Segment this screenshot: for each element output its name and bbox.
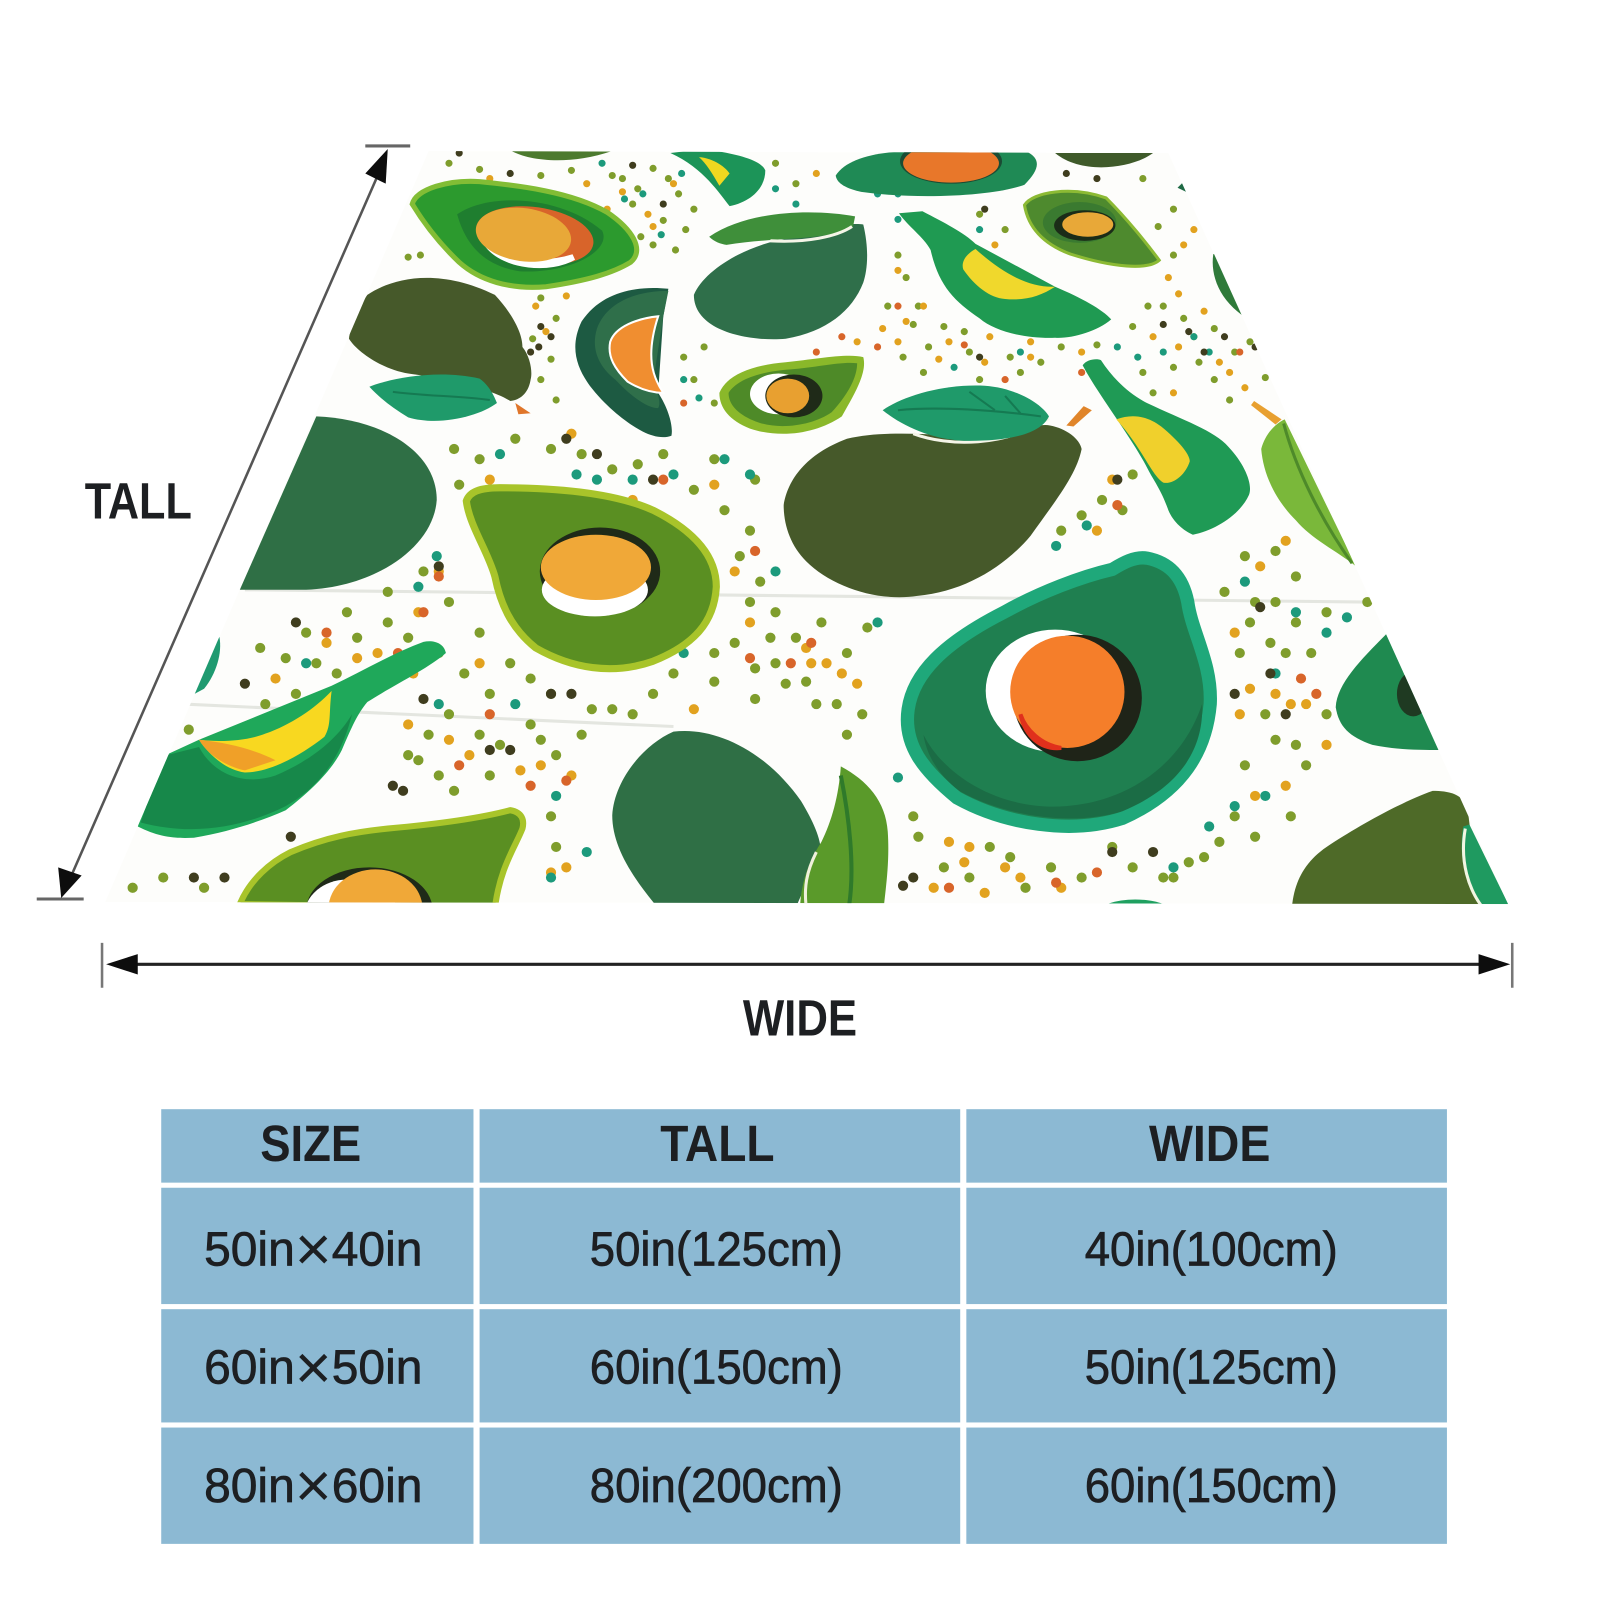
- row 80in x 60in: ×: [295, 1451, 332, 1521]
- avocado whole: big dark green left: [240, 416, 437, 590]
- avocado slice: bottom left with yellow flesh: [138, 641, 446, 838]
- row 60in x 50in: 60in(150cm): [590, 1342, 843, 1395]
- avocado fragment: bottom edge: [1107, 899, 1163, 904]
- polka dots: [133, 153, 1367, 893]
- header row: TALL: [660, 1115, 774, 1172]
- avocado fragment: top right dark: [1055, 153, 1153, 167]
- avocado whole: bottom right olive: [1292, 791, 1510, 908]
- tall label: TALL: [85, 472, 192, 529]
- row 50in x 40in: [161, 1188, 1447, 1304]
- blanket base: [105, 151, 1508, 904]
- header row: SIZE: [260, 1115, 361, 1172]
- row 50in x 40in: 40in: [332, 1223, 422, 1276]
- avocado half: small centre: [719, 356, 864, 434]
- avocado slice: dark teal with orange flesh: [575, 288, 672, 437]
- tall dimension arrow: [37, 146, 410, 899]
- row 50in x 40in: ×: [295, 1214, 332, 1284]
- avocado half: top centre: [836, 152, 1037, 196]
- size table: [161, 1109, 1447, 1544]
- leaf: right edge: [1251, 401, 1356, 566]
- avocado whole with leaf: large olive: [784, 385, 1092, 597]
- row 60in x 50in: ×: [295, 1333, 332, 1403]
- row 60in x 50in: 50in: [332, 1342, 422, 1395]
- avocado slice: upper right with yellow flesh: [899, 211, 1111, 338]
- avocado whole with leaf: left olive: [349, 278, 531, 421]
- row 60in x 50in: 60in: [204, 1342, 295, 1395]
- row 80in x 60in: 60in: [332, 1460, 422, 1513]
- avocado fragment: right edge: [1212, 254, 1242, 315]
- row 80in x 60in: 80in: [204, 1460, 295, 1513]
- wide label: WIDE: [743, 990, 857, 1047]
- leaf: bottom centre: [800, 766, 888, 908]
- avocado half: largest emerald: [907, 558, 1210, 826]
- avocado half: right edge: [1336, 634, 1441, 750]
- row 80in x 60in: 80in(200cm): [590, 1460, 843, 1513]
- row 50in x 40in: 50in: [204, 1223, 295, 1276]
- row 50in x 40in: 40in(100cm): [1085, 1223, 1338, 1276]
- header row: WIDE: [1149, 1115, 1270, 1172]
- row 60in x 50in: 50in(125cm): [1085, 1342, 1338, 1395]
- avocado half: lime centre: [466, 488, 716, 669]
- avocado slice: left edge: [194, 637, 220, 694]
- avocado slice: right with yellow flesh: [1083, 359, 1250, 535]
- avocado half: bottom left lime: [237, 807, 526, 903]
- avocado whole: bottom centre: [612, 731, 821, 908]
- row 60in x 50in: [161, 1309, 1447, 1422]
- header row: [161, 1109, 1447, 1183]
- avocado fragment: top edge olive: [512, 151, 610, 160]
- fabric folds: [184, 590, 1367, 727]
- avocado slice: top: [670, 149, 765, 206]
- blanket with avocado pattern: [105, 139, 1510, 953]
- wide dimension arrow: [102, 943, 1512, 988]
- row 80in x 60in: [161, 1428, 1447, 1544]
- avocado half: small top right: [1024, 191, 1159, 266]
- avocado whole with leaf: top centre: [694, 212, 867, 339]
- row 80in x 60in: 60in(150cm): [1085, 1460, 1338, 1513]
- row 50in x 40in: 50in(125cm): [590, 1223, 843, 1276]
- avocado fragment: top right edge: [1178, 183, 1186, 192]
- avocado: green half top left: [412, 181, 637, 287]
